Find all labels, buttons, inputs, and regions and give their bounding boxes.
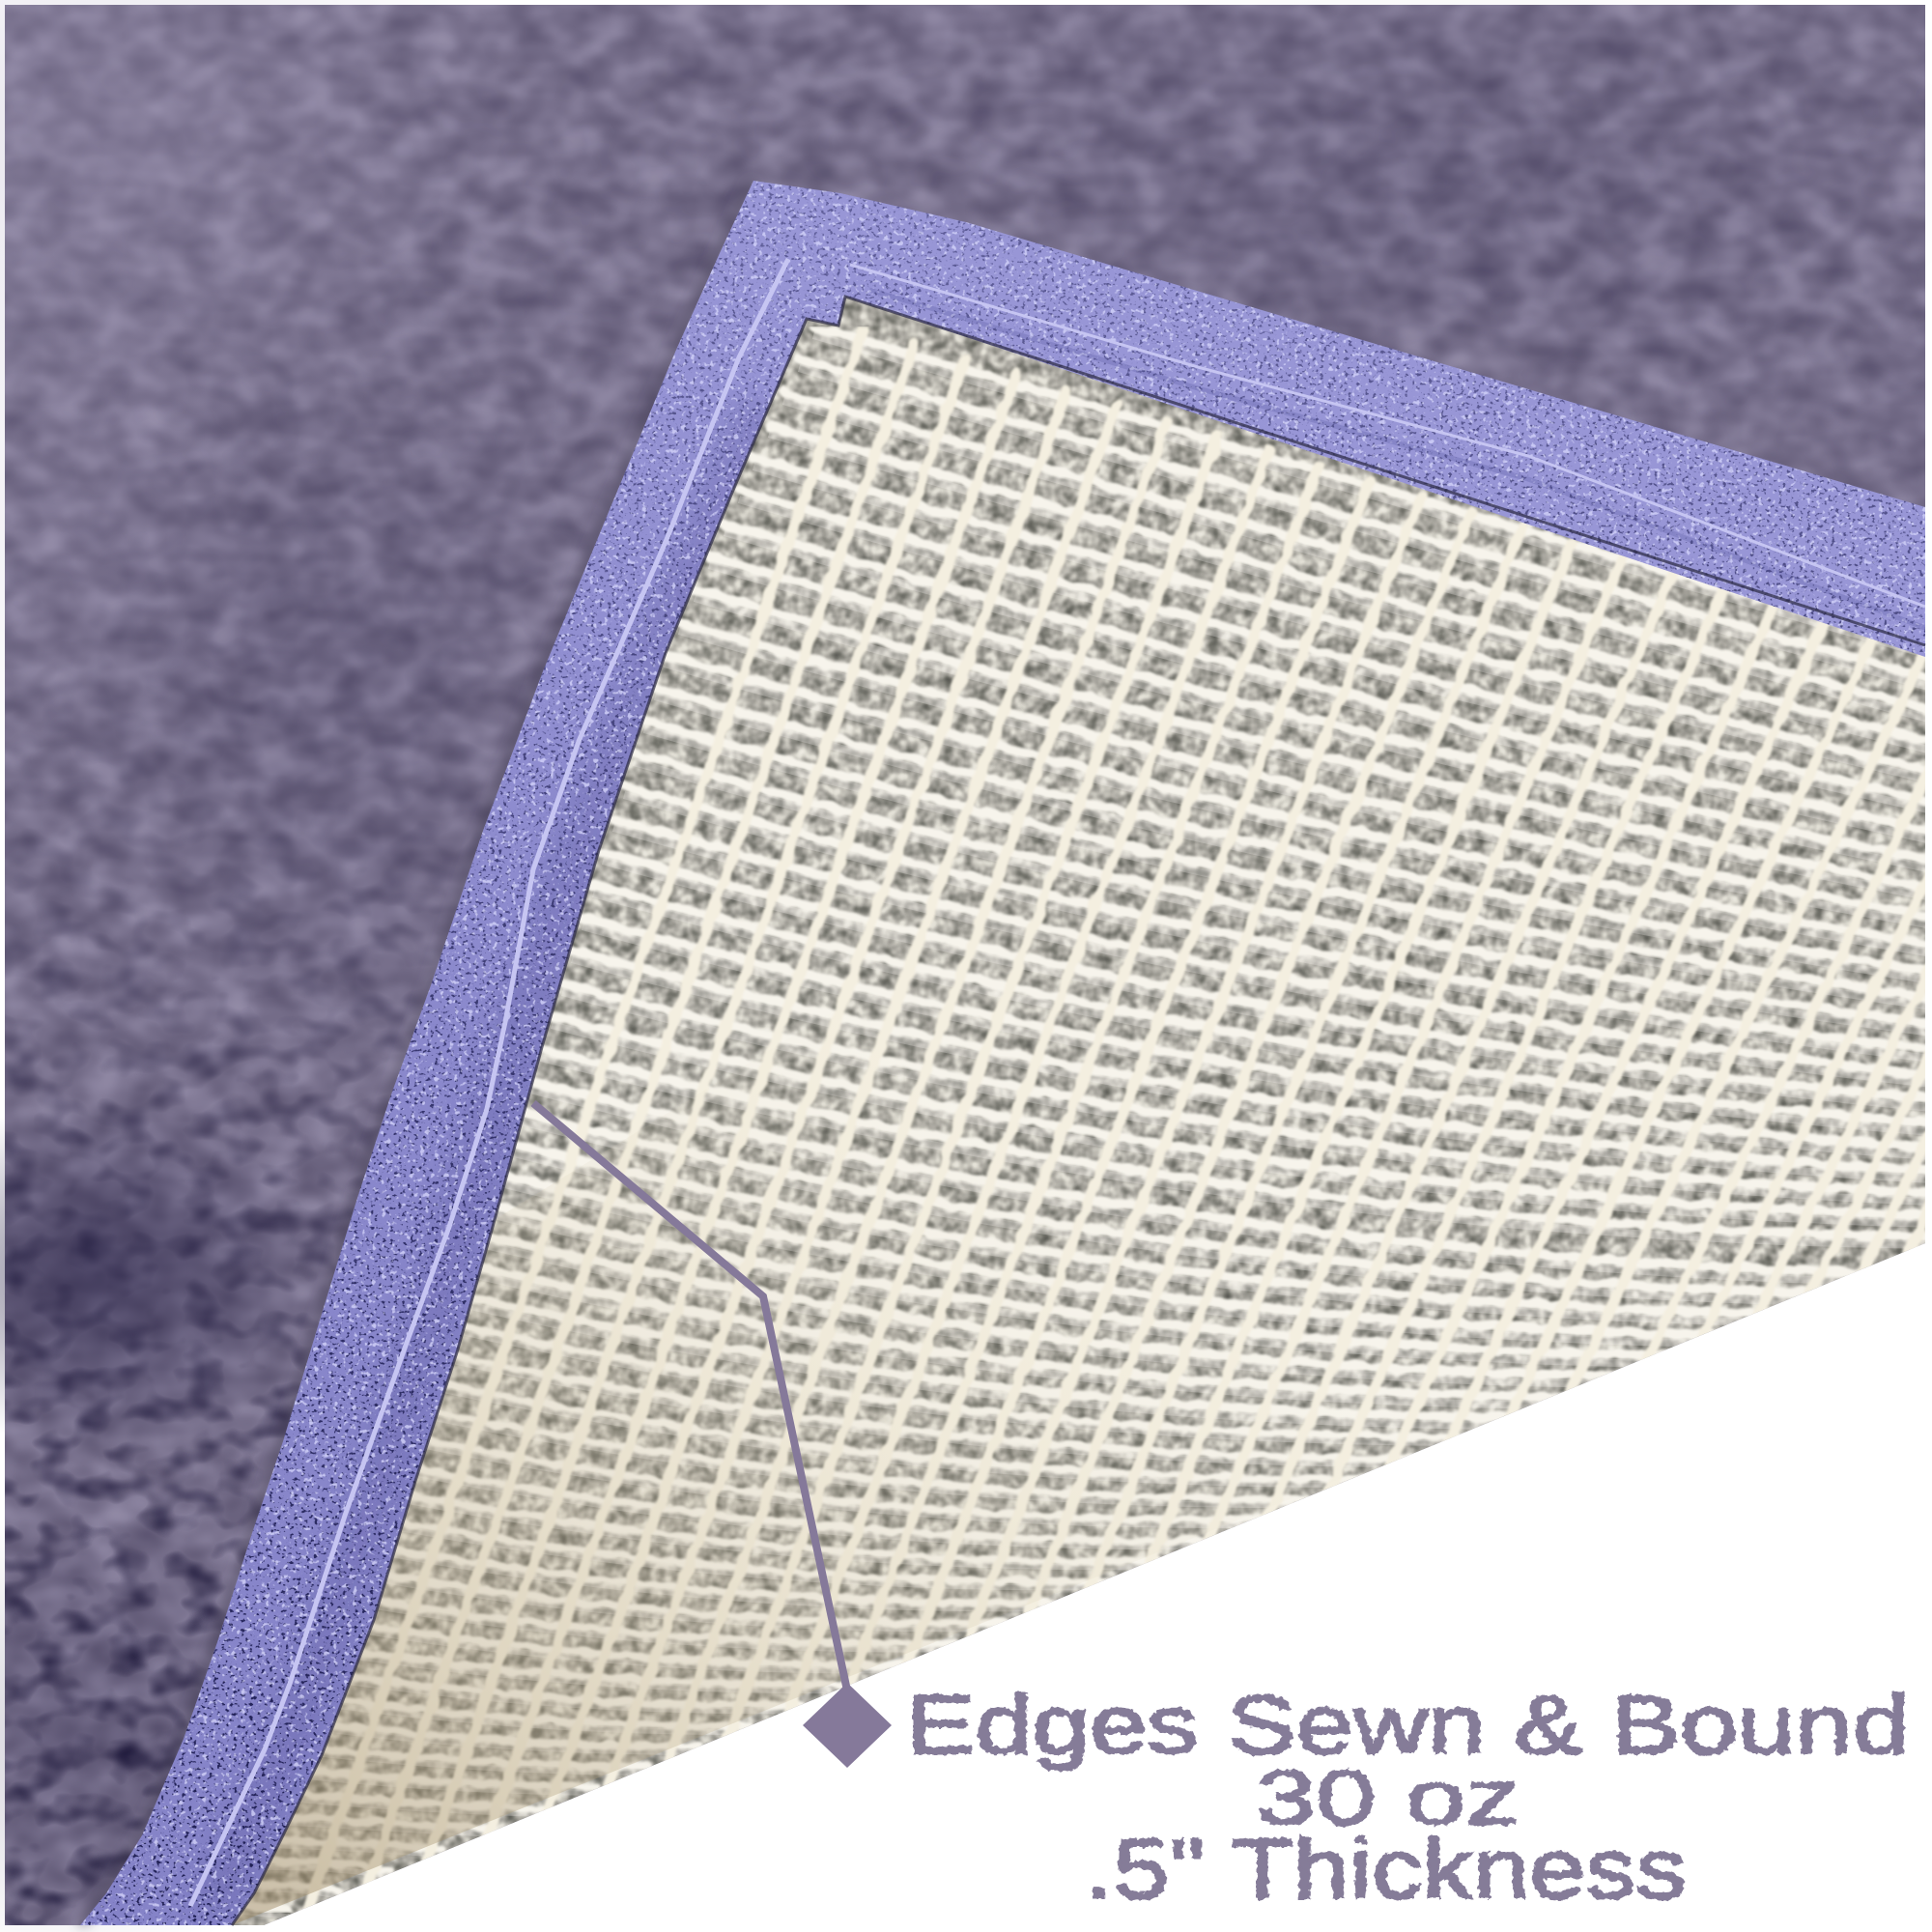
- text line: thickness: .5" Thickness: [1085, 1821, 1687, 1917]
- backing cream mesh: [243, 327, 1932, 1913]
- callout text: [906, 1679, 1910, 1917]
- carpet dark blotches: [5, 371, 1731, 1925]
- panel: woven backing: [232, 290, 1932, 1932]
- backing lit lower lips of cells: [243, 335, 1932, 1917]
- icon: callout diamond: [803, 1683, 892, 1768]
- backing grey cell fill: [232, 290, 1932, 1932]
- white floor area below the rolled corner: [264, 1243, 1932, 1932]
- binding inner darker half: [213, 406, 763, 1913]
- left seam stitching: [190, 259, 788, 1906]
- inner dark shadow of seam: [869, 290, 1925, 628]
- top seam stitching: [850, 265, 1925, 607]
- text line: Edges Sewn and Bound: Edges Sewn & Bound: [906, 1679, 1910, 1772]
- text line: 30 oz: 30 oz: [1256, 1754, 1520, 1840]
- binding inner edge shadow: [232, 297, 1925, 1925]
- backing warm tint: [234, 1103, 1176, 1924]
- carpet edge shadow: [80, 181, 753, 1925]
- callout leader line: [533, 1103, 847, 1690]
